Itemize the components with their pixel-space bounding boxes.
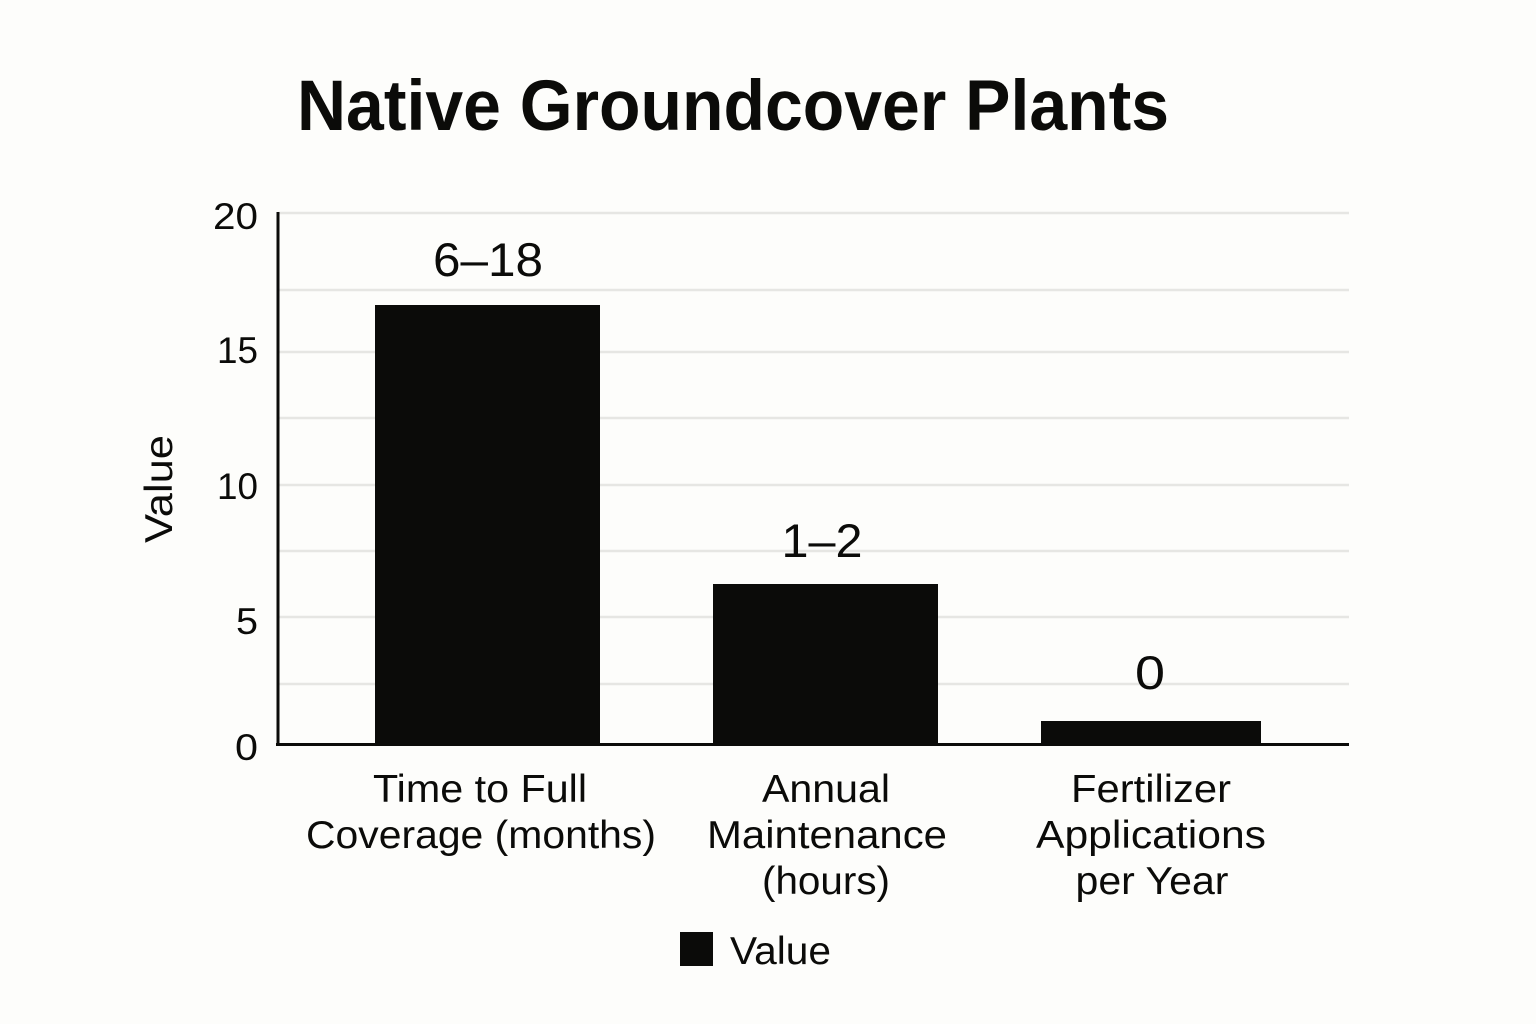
y axis labels: [213, 196, 258, 768]
category label: fertilizer applications: [1036, 768, 1266, 903]
bar: annual maintenance: [713, 584, 938, 744]
title: Native Groundcover Plants: [297, 67, 1169, 146]
legend: Value: [730, 930, 831, 973]
category label: annual maintenance: [707, 768, 947, 903]
y axis labels: 10: [217, 466, 258, 507]
y axis labels: 5: [236, 601, 258, 642]
bar: time to full coverage: [375, 305, 600, 744]
category label: time to full coverage: Coverage (months): [306, 814, 656, 857]
legend: [680, 930, 831, 973]
category label: annual maintenance: Annual: [762, 768, 890, 811]
bar: fertilizer applications: [1041, 721, 1261, 744]
value label: 0: 0: [1135, 646, 1165, 699]
value label: 6–18: 6–18: [433, 233, 543, 286]
category label: time to full coverage: [306, 768, 656, 857]
category label: fertilizer applications: Applications: [1036, 814, 1266, 857]
axes: [276, 212, 1349, 745]
y axis labels: 15: [217, 330, 258, 371]
category label: time to full coverage: Time to Full: [373, 768, 587, 811]
y axis labels: 0: [235, 727, 258, 768]
y axis labels: 20: [213, 196, 258, 237]
y axis title: Value: [138, 435, 181, 543]
category label: annual maintenance: Maintenance: [707, 814, 947, 857]
category label: annual maintenance: (hours): [762, 860, 890, 903]
bar chart: [138, 196, 1349, 903]
category label: fertilizer applications: Fertilizer: [1071, 768, 1231, 811]
category label: fertilizer applications: per Year: [1076, 860, 1228, 903]
value label: 1–2: 1–2: [782, 514, 862, 567]
